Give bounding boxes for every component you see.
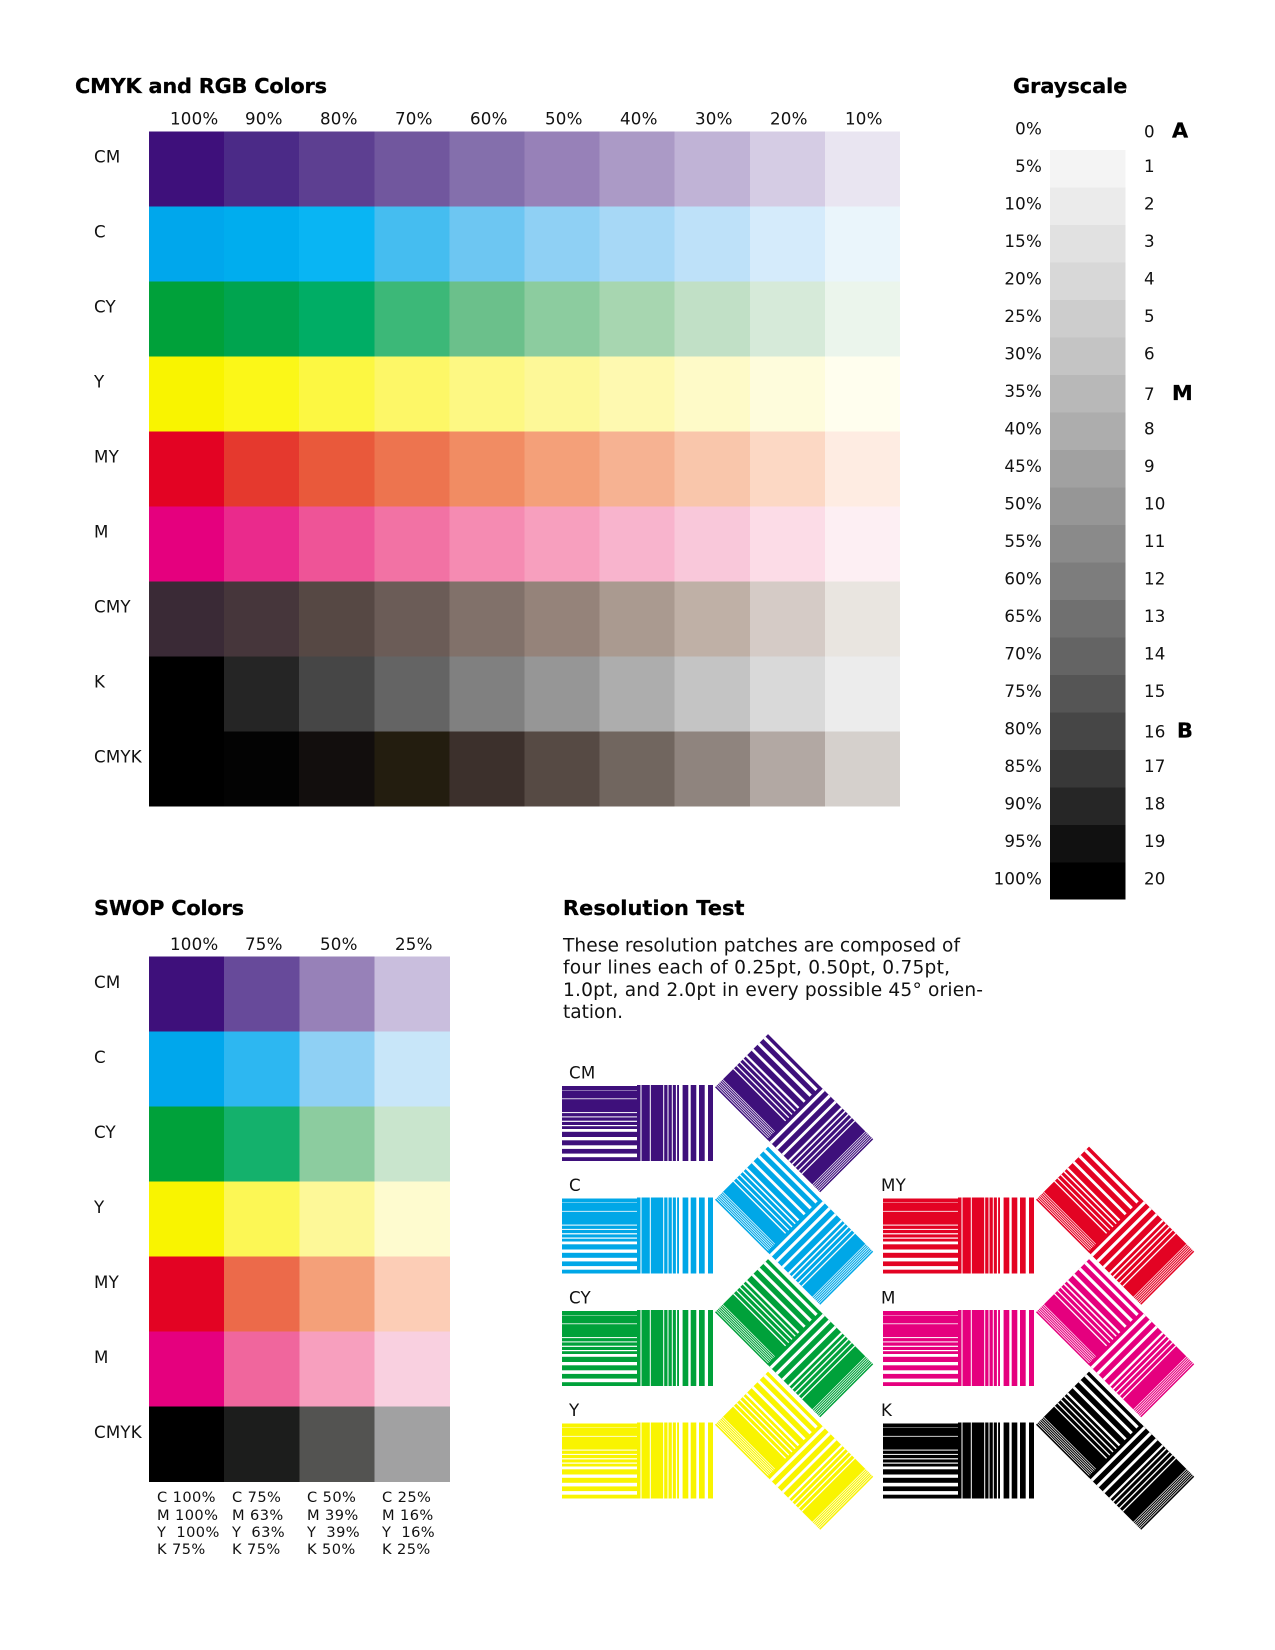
percent labels: 65% — [1004, 607, 1042, 626]
marker letters: M — [1172, 381, 1193, 405]
heading: SWOP Colors: SWOP Colors — [94, 896, 244, 920]
step numbers: 13 — [1144, 607, 1166, 626]
row labels: CM — [94, 973, 120, 992]
resolution patch: CY — [562, 1259, 873, 1417]
heading: Resolution Test: Resolution Test — [563, 896, 745, 920]
marker letters: B — [1177, 718, 1193, 742]
row labels: K — [94, 672, 106, 692]
CMYK values for each column: M 39% — [307, 1507, 359, 1524]
step numbers: 8 — [1144, 420, 1155, 438]
row: CMYK — [149, 731, 900, 806]
marker letters: A — [1172, 118, 1189, 142]
CMYK values for each column: C 100% — [157, 1489, 216, 1506]
percent labels: 0% — [1015, 120, 1042, 138]
percent labels: 100% — [994, 870, 1042, 888]
CMYK values for each column: K 25% — [382, 1541, 431, 1558]
CMYK values for each column: Y 16% — [381, 1524, 435, 1541]
marker letters — [1172, 118, 1193, 742]
step numbers: 7 — [1144, 385, 1155, 404]
step numbers: 4 — [1144, 270, 1155, 288]
row: CM — [149, 956, 450, 1031]
tint grid — [149, 131, 900, 806]
heading: Grayscale: Grayscale — [1013, 74, 1127, 98]
step numbers: 20 — [1144, 870, 1166, 888]
resolution patch: M: M — [881, 1288, 896, 1308]
panel: grayscale ramp — [994, 112, 1193, 900]
row: CMYK — [149, 1406, 450, 1482]
grayscale swatches — [1050, 112, 1126, 900]
row: M — [149, 1331, 450, 1406]
text block: resolution description: tation. — [563, 1002, 623, 1023]
CMYK values for each column: K 50% — [307, 1541, 356, 1558]
percent labels: 70% — [1004, 644, 1042, 664]
CMYK values for each column: M 16% — [382, 1507, 434, 1524]
column headers: 50% — [545, 110, 583, 128]
percent labels: 40% — [1004, 420, 1042, 438]
row labels: M — [94, 522, 109, 542]
step numbers: 11 — [1144, 532, 1166, 551]
row: CMY — [149, 581, 900, 656]
row labels — [93, 973, 143, 1442]
resolution patch: Y: Y — [568, 1401, 580, 1420]
percent labels: 45% — [1004, 457, 1042, 476]
row: K — [149, 656, 900, 731]
column headers — [170, 935, 433, 954]
column headers: 60% — [470, 110, 508, 128]
column headers: 50% — [320, 935, 358, 954]
column headers: 90% — [245, 110, 283, 128]
percent labels: 85% — [1004, 757, 1042, 776]
column headers: 80% — [320, 110, 358, 128]
heading: CMYK and RGB Colors: CMYK and RGB Colors — [75, 74, 327, 98]
step numbers: 5 — [1144, 307, 1155, 326]
row: MY — [149, 431, 900, 506]
resolution patch: CY: CY — [569, 1288, 592, 1308]
row: CY — [149, 281, 900, 356]
step numbers: 0 — [1144, 122, 1155, 142]
column headers: 25% — [395, 935, 433, 954]
row labels: C — [94, 1048, 106, 1067]
percent labels: 35% — [1004, 382, 1042, 401]
percent labels: 50% — [1004, 494, 1042, 514]
text block: resolution description — [562, 936, 983, 1023]
row: CM — [149, 131, 900, 206]
percent labels: 10% — [1004, 194, 1042, 214]
CMYK values for each column: C 50% — [307, 1489, 356, 1506]
column headers: 40% — [620, 110, 658, 128]
step numbers — [1144, 122, 1166, 888]
percent labels: 80% — [1004, 720, 1042, 738]
step numbers: 2 — [1144, 194, 1155, 214]
step numbers: 18 — [1144, 794, 1166, 814]
percent labels: 25% — [1004, 307, 1042, 326]
row labels: CM — [94, 148, 120, 166]
row labels: CMYK — [94, 748, 143, 766]
text block: resolution description: These resolution patches are composed of — [562, 936, 960, 956]
CMYK values for each column — [156, 1489, 435, 1558]
step numbers: 15 — [1144, 682, 1166, 701]
row labels: C — [94, 222, 106, 242]
step numbers: 3 — [1144, 232, 1155, 251]
row: C — [149, 206, 900, 281]
resolution patch: M — [881, 1259, 1194, 1417]
row: M — [149, 506, 900, 581]
row: Y — [149, 1181, 450, 1256]
row: Y — [149, 356, 900, 431]
percent labels: 55% — [1004, 532, 1042, 551]
column headers: 100% — [170, 935, 218, 954]
CMYK values for each column: M 63% — [232, 1507, 284, 1524]
row labels: MY — [94, 1273, 120, 1292]
resolution patch: MY — [881, 1147, 1194, 1305]
column headers: 10% — [845, 110, 883, 128]
step numbers: 1 — [1144, 157, 1155, 176]
step numbers: 9 — [1144, 457, 1155, 476]
step numbers: 17 — [1144, 757, 1166, 776]
step numbers: 10 — [1144, 494, 1166, 514]
row: CY — [149, 1106, 450, 1181]
row: MY — [149, 1256, 450, 1331]
percent labels: 95% — [1004, 832, 1042, 851]
CMYK values for each column: M 100% — [157, 1507, 218, 1524]
text block: resolution description: four lines each of 0.25pt, 0.50pt, 0.75pt, — [563, 958, 950, 978]
step numbers: 14 — [1144, 644, 1166, 664]
row labels: Y — [93, 1198, 105, 1217]
resolution patch: Y — [562, 1372, 873, 1530]
percent labels: 30% — [1004, 344, 1042, 364]
swatch grid — [149, 956, 450, 1482]
resolution patch: C — [562, 1147, 873, 1305]
step numbers: 6 — [1144, 344, 1155, 364]
step numbers: 12 — [1144, 570, 1166, 588]
row labels: M — [94, 1348, 109, 1367]
CMYK values for each column: K 75% — [157, 1541, 206, 1558]
CMYK values for each column: C 75% — [232, 1489, 281, 1506]
column headers: 70% — [395, 110, 433, 128]
percent labels: 5% — [1015, 157, 1042, 176]
resolution patch: K — [881, 1372, 1194, 1530]
text block: resolution description: 1.0pt, and 2.0pt in every possible 45° orien- — [563, 980, 983, 1001]
CMYK values for each column: Y 63% — [231, 1524, 285, 1541]
resolution patch: MY: MY — [881, 1176, 907, 1195]
row labels: CY — [94, 1123, 117, 1142]
row: C — [149, 1031, 450, 1106]
column headers — [170, 110, 883, 128]
percent labels: 20% — [1004, 270, 1042, 288]
column headers: 75% — [245, 935, 283, 954]
percent labels — [994, 120, 1042, 888]
row labels: Y — [93, 372, 105, 392]
resolution patch: CM: CM — [569, 1064, 595, 1082]
CMYK values for each column: K 75% — [232, 1541, 281, 1558]
column headers: 100% — [170, 110, 218, 128]
percent labels: 90% — [1004, 794, 1042, 814]
row labels: CY — [94, 298, 117, 316]
panel: CMYK and RGB tint chart — [93, 110, 900, 806]
step numbers: 16 — [1144, 722, 1166, 742]
row labels: CMYK — [94, 1423, 143, 1442]
resolution patch: CM — [562, 1034, 873, 1192]
row labels — [93, 148, 143, 766]
percent labels: 75% — [1004, 682, 1042, 701]
column headers: 20% — [770, 110, 808, 128]
row labels: CMY — [94, 598, 131, 616]
step numbers: 19 — [1144, 832, 1166, 851]
CMYK values for each column: Y 100% — [156, 1524, 220, 1541]
resolution patch: C: C — [569, 1176, 581, 1195]
CMYK values for each column: Y 39% — [306, 1524, 360, 1541]
percent labels: 60% — [1004, 570, 1042, 588]
panel: SWOP tint chart — [93, 935, 450, 1558]
percent labels: 15% — [1004, 232, 1042, 251]
row labels: MY — [94, 448, 120, 466]
resolution patch: K: K — [881, 1401, 893, 1420]
CMYK values for each column: C 25% — [382, 1489, 431, 1506]
column headers: 30% — [695, 110, 733, 128]
